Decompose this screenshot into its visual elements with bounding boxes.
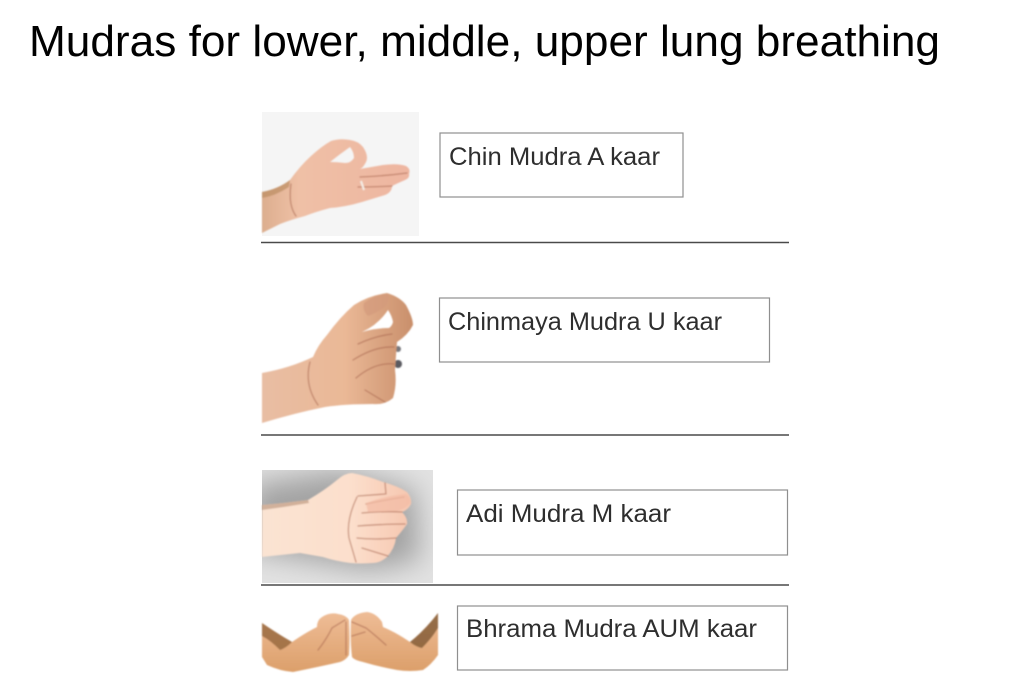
label box: Chin Mudra A kaar [440,133,683,197]
icon: Bhrama Mudra hands photo [262,612,438,672]
title: Mudras for lower, middle, upper lung breathing [29,17,940,66]
label box: Adi Mudra M kaar: Adi Mudra M kaar [466,500,671,528]
label box: Chinmaya Mudra U kaar: Chinmaya Mudra U kaar [448,308,722,336]
panel: Adi Mudra [250,470,788,583]
panel: Chin Mudra [262,112,683,236]
label box: Bhrama Mudra AUM kaar: Bhrama Mudra AUM kaar [466,615,757,643]
label box: Bhrama Mudra AUM kaar [458,606,788,670]
label box: Chinmaya Mudra U kaar [440,298,770,362]
label box: Adi Mudra M kaar [458,490,788,555]
label box: Chin Mudra A kaar: Chin Mudra A kaar [449,143,660,171]
icon: Chinmaya Mudra hand photo [262,293,413,423]
icon: Chin Mudra hand photo [262,112,419,236]
icon: Adi Mudra fist photo [250,470,433,583]
panel: Chinmaya Mudra [262,293,770,423]
panel: Bhrama Mudra [262,606,788,672]
